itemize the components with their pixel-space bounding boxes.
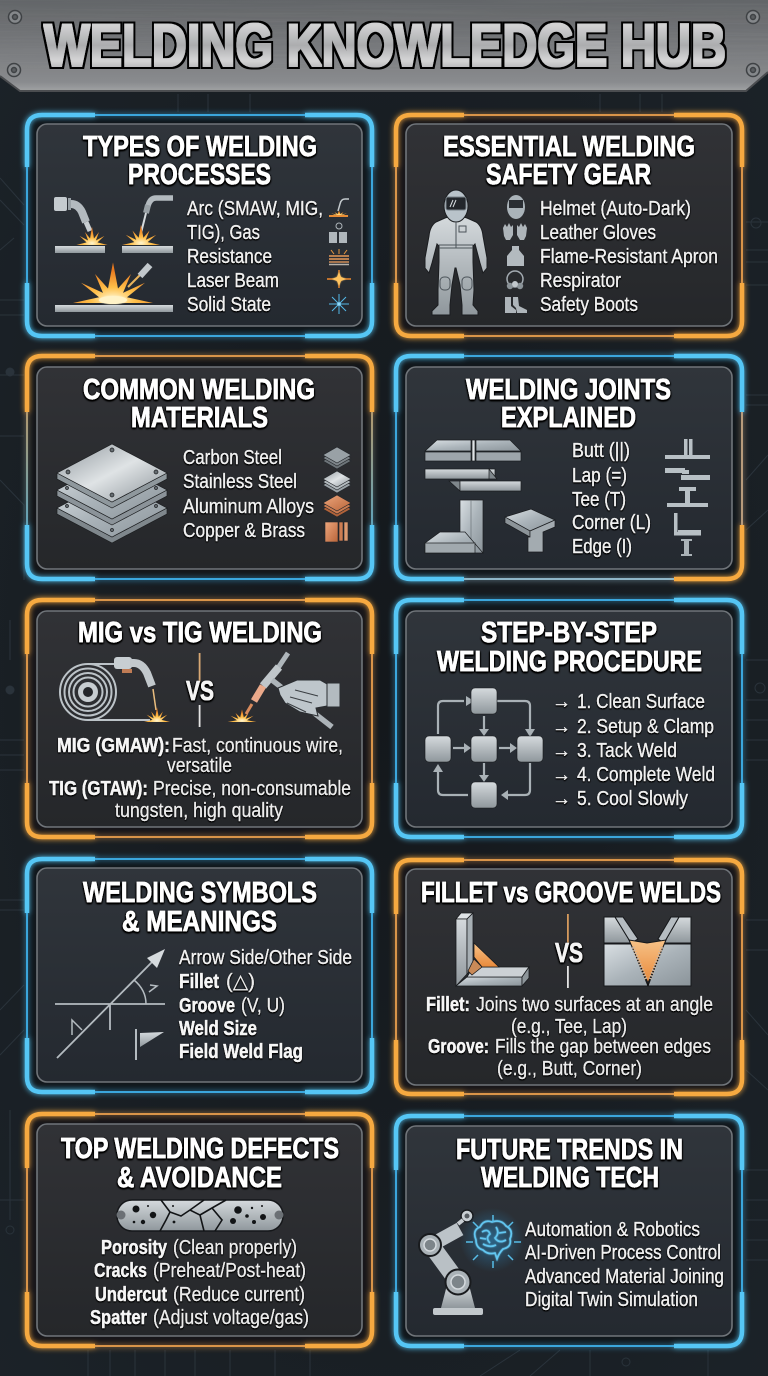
process list: Laser Beam bbox=[187, 270, 279, 292]
joints list: Corner (L) bbox=[572, 512, 651, 534]
panel: welding symbols and meanings bbox=[27, 859, 372, 1092]
heading bbox=[443, 131, 695, 191]
panel: top welding defects and avoidance bbox=[27, 1114, 372, 1346]
procedure steps bbox=[552, 691, 715, 810]
heading: STEP-BY-STEP bbox=[481, 617, 657, 649]
symbols list: (V, U) bbox=[241, 995, 285, 1017]
MIG and TIG descriptions: Precise, non-consumable bbox=[153, 778, 351, 800]
procedure steps: 2. Setup & Clamp bbox=[577, 716, 714, 738]
materials list: Aluminum Alloys bbox=[183, 496, 314, 518]
panel: common welding materials bbox=[27, 356, 372, 579]
welding process illustration bbox=[54, 197, 173, 312]
procedure steps: → bbox=[552, 691, 571, 713]
materials list bbox=[183, 447, 314, 542]
process list: Resistance bbox=[187, 246, 272, 268]
heading: WELDING TECH bbox=[481, 1162, 659, 1194]
joints list bbox=[572, 440, 651, 558]
fillet and groove descriptions: Fills the gap between edges bbox=[495, 1036, 711, 1058]
symbols list: Arrow Side/Other Side bbox=[179, 947, 352, 969]
procedure steps: → bbox=[552, 740, 571, 762]
fillet and groove descriptions: Groove: bbox=[428, 1036, 489, 1058]
heading: WELDING PROCEDURE bbox=[437, 646, 702, 678]
heading: TOP WELDING DEFECTS bbox=[61, 1133, 339, 1165]
process list: Arc (SMAW, MIG, bbox=[187, 198, 323, 220]
illustration: joint types bbox=[425, 440, 555, 553]
panel: types of welding processes bbox=[27, 115, 372, 336]
gear list: Respirator bbox=[540, 270, 621, 292]
panel: MIG vs TIG welding bbox=[27, 600, 372, 837]
heading: & MEANINGS bbox=[122, 906, 277, 938]
defects list: (Adjust voltage/gas) bbox=[153, 1307, 309, 1329]
heading bbox=[466, 374, 671, 434]
materials list: Copper & Brass bbox=[183, 520, 305, 542]
panel: essential welding safety gear bbox=[396, 115, 742, 336]
heading: SAFETY GEAR bbox=[486, 159, 651, 191]
icon: robotic arm bbox=[419, 1210, 483, 1315]
joints list: Tee (T) bbox=[572, 489, 626, 511]
process list bbox=[187, 198, 323, 316]
MIG and TIG descriptions bbox=[49, 735, 351, 822]
heading: WELDING SYMBOLS bbox=[83, 877, 317, 909]
illustration: MIG wire spool and torch bbox=[60, 657, 170, 722]
heading bbox=[83, 877, 317, 938]
defects list: (Clean properly) bbox=[173, 1237, 297, 1259]
defects list bbox=[90, 1237, 309, 1329]
heading: PROCESSES bbox=[128, 159, 271, 191]
process list: TIG), Gas bbox=[187, 222, 260, 244]
gear list: Flame-Resistant Apron bbox=[540, 246, 718, 268]
panel: fillet vs groove welds bbox=[396, 860, 742, 1094]
MIG and TIG descriptions: tungsten, high quality bbox=[115, 800, 283, 822]
fillet and groove descriptions bbox=[426, 994, 713, 1080]
defects list: (Preheat/Post-heat) bbox=[153, 1260, 306, 1282]
joint mini icons bbox=[665, 439, 710, 556]
heading bbox=[456, 1134, 683, 1194]
heading: WELDING JOINTS bbox=[466, 374, 671, 406]
materials list: Stainless Steel bbox=[183, 471, 297, 493]
procedure steps: → bbox=[552, 716, 571, 738]
procedure steps: → bbox=[552, 764, 571, 786]
material swatch icons bbox=[323, 447, 351, 542]
heading: TYPES OF WELDING bbox=[83, 131, 317, 163]
vs label: VS bbox=[186, 675, 214, 706]
icon: protective suit figure bbox=[425, 190, 487, 315]
illustration: stacked metal plates bbox=[57, 444, 167, 543]
heading bbox=[61, 1133, 339, 1194]
procedure steps: 5. Cool Slowly bbox=[577, 788, 688, 810]
gear mini icons bbox=[503, 195, 527, 313]
panel: future trends in welding tech bbox=[396, 1116, 742, 1346]
heading bbox=[437, 617, 702, 678]
divider bbox=[567, 914, 569, 988]
fillet and groove descriptions: Fillet: bbox=[426, 994, 470, 1016]
symbols list: (△) bbox=[226, 971, 255, 993]
flow diagram bbox=[425, 688, 543, 808]
panel: step-by-step welding procedure bbox=[396, 600, 742, 837]
defects list: (Reduce current) bbox=[173, 1284, 305, 1306]
heading: & AVOIDANCE bbox=[117, 1162, 282, 1194]
MIG and TIG descriptions: TIG (GTAW): bbox=[49, 778, 148, 800]
procedure steps: 3. Tack Weld bbox=[577, 740, 677, 762]
trends list: Automation & Robotics bbox=[525, 1219, 700, 1241]
trends list: Digital Twin Simulation bbox=[525, 1289, 698, 1311]
heading bbox=[83, 131, 317, 191]
defects list: Spatter bbox=[90, 1307, 147, 1329]
heading: ESSENTIAL WELDING bbox=[443, 131, 695, 163]
illustration: groove weld bbox=[604, 917, 691, 986]
symbols list: Groove bbox=[179, 995, 235, 1017]
process list: Solid State bbox=[187, 294, 271, 316]
gear list: Safety Boots bbox=[540, 294, 638, 316]
fillet and groove descriptions: (e.g., Tee, Lap) bbox=[511, 1016, 627, 1038]
joints list: Butt (||) bbox=[572, 440, 630, 462]
gear list: Leather Gloves bbox=[540, 222, 656, 244]
MIG and TIG descriptions: MIG (GMAW): bbox=[57, 735, 170, 757]
symbols list bbox=[179, 947, 352, 1063]
heading: FUTURE TRENDS IN bbox=[456, 1134, 683, 1166]
symbols list: Weld Size bbox=[179, 1018, 257, 1040]
defects list: Cracks bbox=[94, 1260, 147, 1282]
defects list: Undercut bbox=[95, 1284, 167, 1306]
fillet and groove descriptions: Joins two surfaces at an angle bbox=[476, 994, 713, 1016]
trends list bbox=[525, 1219, 724, 1311]
heading bbox=[83, 374, 315, 434]
symbols list: Field Weld Flag bbox=[179, 1041, 303, 1063]
illustration: defective weld bead bbox=[116, 1200, 284, 1231]
process mini icons bbox=[327, 199, 351, 314]
gear list bbox=[540, 198, 718, 316]
divider bbox=[199, 653, 200, 727]
fillet and groove descriptions: (e.g., Butt, Corner) bbox=[497, 1058, 642, 1080]
gear list: Helmet (Auto-Dark) bbox=[540, 198, 691, 220]
heading: COMMON WELDING bbox=[83, 374, 315, 406]
MIG and TIG descriptions: versatile bbox=[167, 755, 232, 777]
header plate bbox=[0, 0, 768, 91]
vs label: VS bbox=[555, 937, 583, 968]
trends list: Advanced Material Joining bbox=[525, 1266, 724, 1288]
trends list: AI-Driven Process Control bbox=[525, 1242, 721, 1264]
materials list: Carbon Steel bbox=[183, 447, 282, 469]
panel: welding joints explained bbox=[396, 356, 742, 579]
heading: MIG vs TIG WELDING bbox=[78, 617, 322, 649]
illustration: fillet weld bbox=[456, 913, 529, 986]
illustration: TIG torch and hand bbox=[228, 653, 340, 727]
procedure steps: 4. Complete Weld bbox=[577, 764, 715, 786]
joints list: Lap (=) bbox=[572, 465, 627, 487]
symbols list: Fillet bbox=[179, 971, 219, 993]
defects list: Porosity bbox=[101, 1237, 168, 1259]
joints list: Edge (I) bbox=[572, 536, 632, 558]
heading: MATERIALS bbox=[131, 402, 268, 434]
heading: EXPLAINED bbox=[501, 402, 636, 434]
icon: glowing AI brain bbox=[460, 1208, 524, 1272]
MIG and TIG descriptions: Fast, continuous wire, bbox=[172, 735, 343, 757]
welding symbol diagram bbox=[55, 949, 165, 1060]
rivets bbox=[8, 10, 760, 76]
procedure steps: 1. Clean Surface bbox=[577, 691, 705, 713]
procedure steps: → bbox=[552, 788, 571, 810]
